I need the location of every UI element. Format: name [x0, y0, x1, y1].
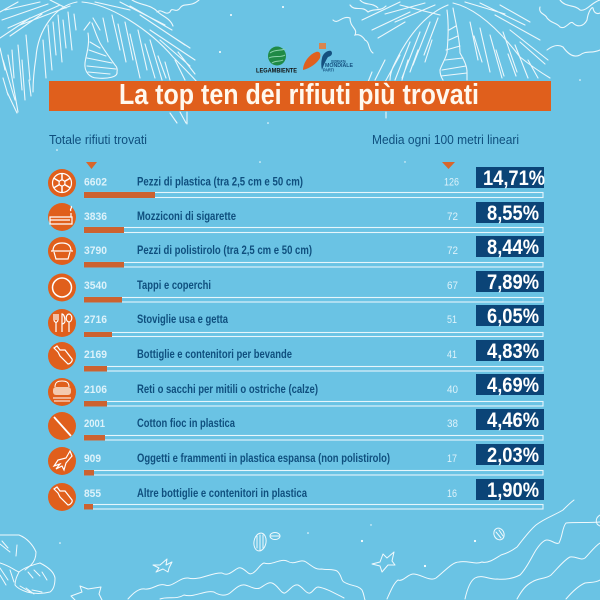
icon: bottle — [48, 342, 76, 370]
row 10: 1,90% — [487, 479, 539, 502]
row 7 — [48, 374, 544, 406]
shells — [253, 532, 267, 552]
row 6: 4,83% — [487, 340, 539, 363]
row 6 — [48, 340, 544, 372]
row 1: 6602 — [84, 176, 107, 188]
row 10: Altre bottiglie e contenitori in plastica — [137, 488, 307, 500]
row 6: 2169 — [84, 349, 107, 361]
row 10 — [48, 479, 544, 511]
row 9: 909 — [84, 453, 101, 465]
row 9: 17 — [447, 453, 457, 465]
icon: cutlery — [48, 309, 76, 337]
sort marker: average — [442, 162, 455, 169]
row 1: 126 — [444, 176, 459, 188]
row 3 — [48, 236, 544, 268]
row 2 — [48, 202, 544, 233]
row 5: Stoviglie usa e getta — [137, 314, 228, 326]
logo: Giornata mondiale parti — [303, 43, 354, 72]
row 7: 40 — [447, 384, 458, 396]
column heading: totals: Totale rifiuti trovati — [49, 133, 147, 147]
title banner: La top ten dei rifiuti più trovati — [119, 79, 479, 111]
row 2: Mozziconi di sigarette — [137, 211, 236, 223]
row 3: 3790 — [84, 245, 107, 257]
row 1: Pezzi di plastica (tra 2,5 cm e 50 cm) — [137, 176, 303, 188]
row 5: 2716 — [84, 314, 107, 326]
icon: plastic pieces — [48, 169, 76, 197]
row 3: 8,44% — [487, 236, 539, 259]
row 8: 4,46% — [487, 409, 539, 432]
icon: foam fragments — [48, 447, 76, 475]
icon: bottle cap — [48, 274, 76, 302]
logo: Giornata mondiale parti: MONDIALE — [325, 63, 354, 69]
waves — [128, 560, 365, 600]
row 2: 72 — [447, 211, 458, 223]
row 9: 2,03% — [487, 444, 539, 467]
stars — [153, 559, 172, 572]
left palm tree — [0, 0, 199, 124]
row 7: 4,69% — [487, 374, 539, 397]
logo: Giornata mondiale parti: GIORNATA — [331, 59, 346, 64]
row 1: 14,71% — [483, 167, 545, 190]
icon: other bottles — [48, 483, 76, 511]
row 8: Cotton fioc in plastica — [137, 418, 235, 430]
row 2: 8,55% — [487, 202, 539, 225]
logo: Legambiente — [256, 46, 298, 74]
bottom beach doodles — [0, 500, 600, 600]
logo: Giornata mondiale parti: PARTI — [323, 68, 334, 72]
row 7: 2106 — [84, 384, 107, 396]
right palm tree — [333, 0, 600, 118]
row 6: 41 — [447, 349, 457, 361]
row 7: Reti o sacchi per mitili o ostriche (calze) — [137, 384, 318, 396]
row 5: 6,05% — [487, 305, 539, 328]
sort marker: totals — [86, 162, 97, 169]
row 3: Pezzi di polistirolo (tra 2,5 cm e 50 cm) — [137, 245, 312, 257]
row 4: 67 — [447, 280, 458, 292]
row 9: Oggetti e frammenti in plastica espansa (non polistirolo) — [137, 453, 390, 465]
row 8: 2001 — [84, 418, 105, 430]
row 10: 16 — [447, 488, 457, 500]
row 1 — [48, 167, 545, 198]
row 8: 38 — [447, 418, 458, 430]
rocks — [0, 535, 36, 572]
row 4: Tappi e coperchi — [137, 280, 211, 292]
column heading: average: Media ogni 100 metri lineari — [372, 133, 519, 147]
row 10: 855 — [84, 488, 101, 500]
logo: Legambiente: LEGAMBIENTE — [256, 68, 298, 74]
row 8 — [48, 409, 544, 440]
icon: cotton bud — [48, 412, 76, 440]
row 4: 7,89% — [487, 271, 539, 294]
row 5 — [48, 305, 544, 337]
icon: mussel net — [48, 378, 76, 406]
row 5: 51 — [447, 314, 457, 326]
row 6: Bottiglie e contenitori per bevande — [137, 349, 292, 361]
row 3: 72 — [447, 245, 458, 257]
row 4 — [48, 271, 544, 302]
row 2: 3836 — [84, 211, 107, 223]
icon: cigarette — [48, 203, 76, 231]
row 4: 3540 — [84, 280, 107, 292]
icon: polystyrene container — [48, 237, 76, 265]
row 9 — [48, 444, 544, 476]
